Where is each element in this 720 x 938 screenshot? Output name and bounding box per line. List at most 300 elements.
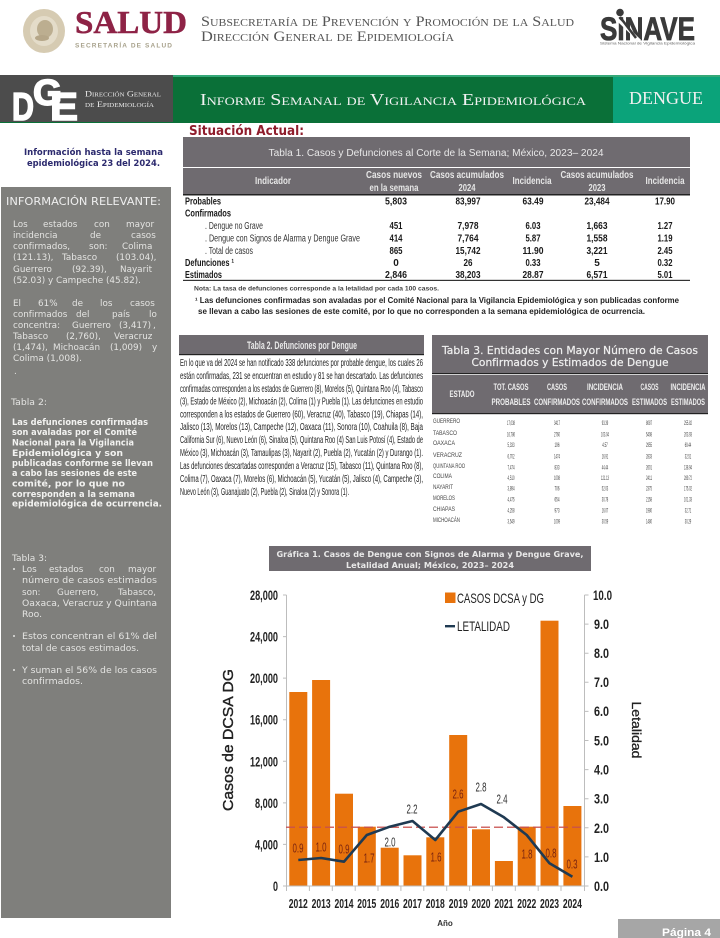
table 3 rows: 6,702: [508, 454, 515, 460]
page number tab: [618, 919, 720, 938]
panel: Tabla 3: 203.93: [684, 432, 692, 438]
table 3 rows: 2601: [646, 466, 652, 472]
table 1 header row: en la semana: [370, 183, 419, 194]
bullet list: Tabla 3 notes: total de casos estimados.: [22, 644, 139, 654]
table 3 rows: 2955: [646, 443, 652, 449]
right axis labels: 4.0: [594, 763, 609, 778]
table 3 rows: 30.29: [685, 520, 692, 526]
table 1 header row: 2024: [458, 183, 476, 194]
left axis labels: 28,000: [250, 588, 278, 603]
right axis labels: 9.0: [594, 617, 609, 632]
paragraph: Tabla 2 note: Las defunciones confirmadas: [12, 417, 148, 427]
header: institutional logos and titles: [23, 4, 695, 53]
table 3 rows: 4,510: [508, 476, 515, 482]
table 3 rows: 16.91: [602, 454, 609, 460]
table 3 rows: COLIMA: [433, 474, 452, 480]
table 1 rows: 11.90: [522, 246, 544, 257]
table 3 rows: 44.44: [602, 466, 609, 472]
legend: [445, 590, 544, 634]
left axis labels: 20,000: [250, 671, 278, 686]
table 3 rows: 8087: [646, 421, 652, 427]
table 1 rows: 0.33: [526, 258, 541, 269]
data labels: lethality: 2.2: [406, 802, 418, 816]
table 1 rows: 3,221: [586, 246, 608, 257]
table 3 rows: 3417: [554, 421, 560, 427]
bullet list: Tabla 3 notes: Y suman el 56% de los casos: [21, 666, 157, 676]
paragraph: concentration: y: [152, 343, 157, 353]
table 1 title band: [183, 137, 690, 167]
table 3 title band: Confirmados y Estimados de Dengue: [472, 357, 668, 369]
table 1 header row: 2023: [588, 183, 606, 194]
year labels: 2016: [380, 897, 399, 911]
table 1 rows: 2,846: [385, 270, 407, 281]
bullet list: Tabla 3 notes: Estos concentran el 61% del: [22, 632, 157, 642]
bullet list: Tabla 3 notes: Tabasco,: [117, 588, 156, 598]
paragraph: incidence: (52.03) y Campeche (45.82).: [13, 276, 141, 286]
panel: Tabla 2: [179, 335, 424, 498]
panel: Tabla 3: [432, 335, 708, 526]
data labels: lethality: 2.0: [384, 834, 396, 850]
year labels: 2021: [494, 897, 513, 911]
table 3 rows: 121.13: [601, 476, 609, 482]
table 1 footnote: [195, 296, 680, 316]
paragraph: Tabla 2 note: a cabo las sesiones de este: [12, 468, 137, 478]
table 3 rows: OAXACA: [433, 441, 455, 447]
table 3 rows: QUINTANA ROO: [433, 464, 465, 470]
table 2 paragraph: Colima (7), Oaxaca (7), Morelos (6), Michoacán (5), Yucatán (5), Jalisco (4), Campeche (3),: [180, 474, 423, 485]
table 1 header row: Incidencia: [646, 176, 685, 187]
table 3 rows: 2375: [646, 486, 652, 492]
table 1 rows: 83,997: [456, 196, 481, 208]
table 3 rows: NAYARIT: [433, 485, 453, 491]
x axis title: Año: [437, 919, 453, 928]
table 1 rows: 6.03: [526, 221, 541, 232]
data labels: lethality: 1.0: [316, 840, 326, 854]
paragraph: Tabla 2 note: son avaladas por el Comité: [12, 427, 137, 437]
table 3 rows: TABASCO: [433, 431, 457, 437]
table 3 rows: 103.04: [601, 432, 609, 438]
table 2 paragraph: están confirmadas, 231 se encuentran en estudio y 81 se han descartado. Las defunciones: [180, 371, 423, 382]
paragraph: concentration: El: [13, 299, 21, 309]
table 1 rows: 23,484: [584, 196, 610, 208]
table 1 footnote: ¹ Las defunciones confirmadas son avaladas por el Comité Nacional para la Vigilancia Epidemiológica y son publicadas conforme: [195, 296, 680, 305]
paragraph: concentration: los: [100, 299, 113, 309]
header subtitle line 1: Subsecretaría de Prevención y Promoción de la Salud: [201, 14, 574, 30]
table 1 rows: Estimados: [185, 270, 222, 281]
table 1 rows: 26: [464, 258, 473, 269]
banner topic: dengue: DENGUE: [629, 88, 703, 108]
table 3 rows: 16,786: [507, 432, 515, 438]
table 1 rows: 63.49: [522, 196, 544, 208]
table 1 note: Nota: La tasa de defunciones corresponde a la letalidad por cada 100 casos.: [194, 286, 439, 292]
year labels: 2015: [357, 897, 376, 911]
table 1 rows: 5.87: [526, 234, 541, 244]
paragraph: incidence: Colima: [122, 242, 152, 252]
paragraph: incidence: (92.39),: [72, 265, 107, 275]
table 3 rows: 69.44: [685, 443, 692, 449]
table 3 rows: [433, 419, 692, 526]
table 1 rows: Defunciones ¹: [185, 258, 234, 269]
table 2 title band: Tabla 2. Defunciones por Dengue: [247, 340, 357, 352]
bullet list: Tabla 3 notes: estados: [49, 565, 84, 575]
bullet list: Tabla 3 notes: mayor: [128, 565, 157, 575]
table 3 rows: 1480: [646, 520, 652, 526]
DGE caption: de Epidemiología: [85, 99, 155, 109]
table 1 rows: 15,742: [456, 246, 481, 257]
panel: Tabla 3: 289.72: [684, 476, 692, 482]
panel: Tabla 3: 255.82: [684, 421, 692, 427]
label: Tabla 2: Tabla 2:: [10, 398, 47, 408]
bullet list: Tabla 3 notes: con: [99, 565, 115, 575]
table 1 rows: 1.19: [658, 234, 673, 244]
bullet list: Tabla 3 notes: Oaxaca, Veracruz y Quintana: [22, 599, 157, 609]
logo: SINAVE: Sistema Nacional de Vigilancia Epidemiológica: [600, 42, 695, 46]
table 1 rows: 414: [390, 234, 403, 244]
paragraph: incidence: Nayarit: [120, 265, 153, 275]
bars: annual cases: [289, 621, 581, 886]
data labels: lethality: 0.3: [566, 856, 578, 872]
table 1 rows: 1,663: [586, 221, 608, 232]
paragraph: concentration: Guerrero: [72, 321, 111, 331]
data labels: lethality: 2.4: [496, 792, 508, 806]
paragraph: concentration: Colima (1,008).: [13, 354, 82, 364]
data labels: lethality: 0.8: [546, 846, 556, 860]
table 3 rows: 1474: [554, 454, 560, 460]
bullet list: Tabla 3 notes: Roo.: [22, 610, 42, 620]
chart title band: Gráfica 1. Casos de Dengue con Signos de Alarma y Dengue Grave,: [276, 550, 584, 559]
table 3 rows: 2760: [554, 432, 560, 438]
logo: DGE: E: [50, 86, 78, 129]
table 1 rows: . Total de casos: [205, 246, 253, 257]
table 3 rows: MORELOS: [433, 496, 455, 502]
paragraph: incidence: casos: [131, 231, 156, 241]
paragraph: incidence: con: [94, 220, 110, 230]
DGE caption: [85, 88, 161, 109]
table 1 header row: Casos acumulados: [560, 170, 634, 181]
table 2 paragraph: Jalisco (13), Morelos (13), Campeche (12), Oaxaca (11), Sonora (10), Coahuila (8), Baja: [180, 422, 423, 433]
data labels: lethality: 1.7: [364, 850, 374, 866]
table 3 rows: 93.39: [602, 421, 609, 427]
table 1 rows: . Dengue no Grave: [205, 221, 263, 232]
paragraph: concentration: confirmados: [13, 310, 68, 320]
data labels: lethality: 2.8: [476, 780, 486, 794]
panel: Tabla 3: 175.02: [684, 486, 692, 492]
year labels: 2017: [403, 897, 422, 911]
table 3 title band: [432, 335, 708, 374]
table 3 rows: 196: [554, 443, 560, 449]
paragraph: Tabla 2 note: corresponden a la semana: [12, 489, 135, 499]
year labels: 2022: [517, 897, 536, 911]
paragraph: Tabla 2 note: Nacional para la Vigilancia: [12, 438, 134, 448]
table 1 rows: 7,978: [458, 221, 479, 232]
paragraph: Tabla 2 note: [12, 417, 162, 508]
logo text: SALUD: SALUD: [75, 4, 187, 40]
table 1 rows: 0.32: [658, 258, 673, 269]
table 3 rows: 2158: [646, 498, 652, 504]
table 1 footnote: se llevan a cabo las sesiones de este comité, por lo que no corresponden a la semana epidemiológica de ocurrencia.: [198, 307, 645, 316]
paragraph: incidence: Los: [13, 220, 28, 230]
paragraph: concentration: ,: [153, 321, 156, 331]
paragraph: concentration: de: [72, 299, 83, 309]
label: Tabla 3: Tabla 3:: [11, 554, 47, 564]
paragraph: Tabla 2 note: comité, por lo que no: [12, 478, 125, 488]
table 2 title band: [179, 335, 424, 355]
paragraph: incidence: estados: [43, 220, 78, 230]
paragraph: Tabla 2 note: Epidemiológica y son: [12, 448, 123, 458]
left axis labels: 16,000: [250, 713, 278, 728]
table 3 title band: Tabla 3. Entidades con Mayor Número de Casos: [441, 345, 698, 357]
table 1 rows: Probables: [185, 196, 221, 208]
panel: Tabla 3: 138.94: [684, 466, 692, 472]
logo: DGE: G: [33, 72, 62, 113]
table 3 rows: 17,038: [507, 421, 515, 427]
table 1 rows: 1,558: [586, 234, 608, 244]
data labels: lethality: [292, 780, 578, 872]
chart title band: Letalidad Anual; México, 2023– 2024: [346, 560, 514, 570]
table 3 rows: 973: [554, 508, 560, 514]
table 3 rows: 30.78: [602, 498, 609, 504]
year labels: [289, 897, 582, 911]
paragraph: concentration: lo: [149, 310, 157, 320]
table 1 rows: Confirmados: [185, 208, 231, 220]
table 1 rows: 28.87: [522, 270, 544, 281]
table 1 header row: Incidencia: [512, 176, 552, 187]
table 2 paragraph: Las defunciones descartadas corresponden a Veracruz (15), Tabasco (11), Quintana Roo (8),: [180, 461, 423, 472]
paragraph: incidence: [13, 220, 156, 286]
logo: DGE: [12, 72, 78, 129]
table 1 rows: 5.01: [658, 270, 673, 281]
paragraph: concentration: (1,009): [110, 343, 142, 353]
axes: [283, 595, 588, 891]
table 3 header row: CONFIRMADOS: [534, 397, 580, 407]
paragraph: concentration: (1,474),: [13, 343, 48, 353]
panel: Tabla 3: 101.33: [684, 498, 692, 504]
table 3 rows: 4,475: [508, 498, 515, 504]
table 3 header row: ESTIMADOS: [632, 397, 667, 407]
table 1 rows: [183, 196, 690, 281]
paragraph: concentration: 61%: [38, 299, 58, 309]
paragraph: concentration: (3,417): [119, 321, 151, 331]
left axis title: Casos de DCSA DG: [220, 669, 237, 811]
right axis labels: 6.0: [594, 704, 609, 719]
paragraph: concentration: (2,760),: [66, 332, 101, 342]
bullet list: Tabla 3 notes: Los: [22, 565, 37, 575]
table 3 rows: 1008: [554, 476, 560, 482]
data labels: lethality: 1.6: [430, 850, 442, 864]
table 3 rows: 1009: [554, 520, 560, 526]
table 1 rows: 7,764: [458, 234, 479, 244]
year labels: 2018: [426, 897, 445, 911]
banner: [0, 72, 720, 129]
left axis labels: 24,000: [250, 630, 278, 645]
panel: Tabla 1: [183, 137, 690, 316]
year labels: 2019: [449, 897, 468, 911]
right axis labels: 5.0: [594, 734, 609, 748]
table 3 header row: ESTADO: [450, 389, 474, 399]
table 1 header row: [183, 168, 690, 196]
paragraph: incidence: (121.13),: [13, 253, 53, 263]
table 3 rows: 5408: [646, 432, 652, 438]
paragraph: incidence: (103.04),: [116, 253, 156, 263]
table 3 rows: 32.51: [685, 454, 692, 460]
right axis labels: 10.0: [593, 588, 612, 603]
DGE caption: Dirección General: [85, 88, 161, 98]
table 1 rows: 38,203: [456, 270, 481, 281]
table 2 paragraph: corresponden a los estados de Guerrero (60), Veracruz (40), Tabasco (19), Chiapas (14),: [180, 410, 423, 420]
right axis labels: 2.0: [594, 821, 609, 836]
table 3 rows: 833: [554, 466, 560, 472]
table 3 header row: CASOS: [640, 382, 658, 392]
right axis labels: 3.0: [594, 792, 609, 807]
right axis labels: 8.0: [594, 646, 609, 661]
table 2 paragraph: México (3), Michoacán (3), Tamaulipas (3), Nayarit (2), Puebla (2), Yucatán (2) y Durango (1).: [180, 448, 423, 459]
table 1 rows: 0: [393, 258, 399, 269]
left axis labels: 12,000: [250, 754, 278, 769]
table 3 header row: CONFIRMADOS: [582, 397, 628, 407]
table 3 rows: 1980: [646, 508, 652, 514]
section heading: Situación Actual:: [189, 124, 304, 139]
panel: relevant information sidebar: [1, 187, 171, 918]
logo subtitle: SECRETARÍA DE SALUD: [75, 40, 172, 50]
paragraph: concentration: concentra:: [13, 321, 60, 331]
left axis labels: [250, 588, 278, 894]
left axis labels: 8,000: [255, 796, 278, 811]
table 2 paragraph: (3), Estado de México (2), Michoacán (2), Colima (1) y Puebla (1). Las defunciones en estudio: [180, 396, 423, 408]
paragraph: concentration: Veracruz: [114, 332, 153, 342]
sidebar heading: INFORMACIÓN RELEVANTE:: [6, 195, 161, 208]
line: lethality: [298, 804, 572, 877]
year labels: 2012: [289, 897, 308, 911]
table 1 rows: 2.45: [658, 246, 673, 257]
table 1 header row: Casos acumulados: [430, 170, 504, 181]
table 3 header row: CASOS: [547, 382, 567, 392]
year labels: 2020: [472, 897, 491, 911]
table 1 rows: 5,803: [385, 196, 407, 208]
paragraph: concentration: Tabasco: [12, 332, 48, 342]
paragraph: Tabla 2 note: publicadas conforme se llevan: [12, 458, 153, 468]
left axis labels: 0: [273, 879, 278, 894]
table 1 title band: Tabla 1. Casos y Defunciones al Corte de la Semana; México, 2023– 2024: [268, 148, 604, 159]
table 3 rows: 706: [554, 486, 560, 492]
table 1 header row: Casos nuevos: [366, 170, 422, 181]
table 3 rows: MICHOACÁN: [433, 517, 460, 524]
table 3 rows: 2411: [646, 476, 652, 482]
table 3 rows: VERACRUZ: [433, 453, 462, 459]
table 2 paragraph: Nuevo León (3), Guanajuato (2), Puebla (2), Sinaloa (2) y Sonora (1).: [180, 487, 349, 498]
data labels: lethality: 1.8: [522, 846, 532, 862]
table 2 paragraph: En lo que va del 2024 se han notificado 338 defunciones por probable dengue, los cuales 26: [180, 358, 423, 369]
table 3 header row: TOT. CASOS: [494, 382, 528, 392]
table 1 rows: 1.27: [658, 221, 673, 232]
table 3 rows: 3,894: [508, 486, 515, 492]
bullet list: Tabla 3 notes: son:: [22, 588, 41, 598]
table 1 rows: 6,571: [586, 270, 608, 281]
banner title: Informe Semanal de Vigilancia Epidemiológica: [200, 90, 586, 109]
table 1 rows: 17.90: [655, 196, 675, 208]
table 3 rows: 16.07: [602, 508, 609, 514]
note: data cutoff: epidemiológica 23 del 2024.: [27, 158, 160, 169]
paragraph: concentration: del: [76, 310, 89, 320]
paragraph: incidence: incidencia: [13, 231, 58, 241]
legend: CASOS DCSA y DG: [457, 590, 544, 606]
table 3 rows: 5,333: [508, 443, 515, 449]
combo chart: dengue cases and lethality: [220, 588, 643, 928]
table 3 rows: 654: [554, 498, 560, 504]
logo: SINAVE: SINAVE: [600, 11, 695, 47]
table 3 rows: 30.59: [602, 520, 609, 526]
paragraph: incidence: son:: [89, 242, 108, 252]
right axis labels: 0.0: [594, 879, 609, 894]
table 2 paragraph: California Sur (6), Nuevo León (6), Sinaloa (5), Quintana Roo (4) San Luis Potosí (4), Estado de: [180, 435, 423, 446]
data labels: lethality: 2.6: [452, 786, 464, 802]
paragraph: concentration: .: [14, 367, 17, 377]
year labels: 2013: [312, 897, 331, 911]
bullet list: Tabla 3 notes: confirmados.: [22, 677, 83, 687]
paragraph: concentration: [12, 299, 157, 377]
table 3 rows: 4.57: [602, 443, 608, 449]
data labels: lethality: 0.9: [338, 842, 350, 856]
table 3 rows: CHIAPAS: [433, 507, 455, 513]
chart title band: [269, 546, 591, 571]
right axis labels: 7.0: [594, 675, 609, 690]
table 1 rows: . Dengue con Signos de Alarma y Dengue Grave: [205, 234, 360, 244]
header subtitle line 2: Dirección General de Epidemiología: [201, 29, 454, 45]
paragraph: concentration: país: [112, 310, 130, 320]
paragraph: incidence: de: [90, 231, 101, 241]
table 3 rows: 4,258: [508, 508, 515, 514]
year labels: 2023: [540, 897, 559, 911]
table 3 rows: 52.03: [602, 486, 609, 492]
table 1 rows: 865: [390, 246, 403, 257]
paragraph: Tabla 2 note: epidemiológica de ocurrencia.: [12, 498, 162, 508]
paragraph: incidence: Guerrero: [13, 265, 52, 275]
paragraph: concentration: Michoacán: [53, 343, 100, 353]
left axis labels: 4,000: [255, 837, 278, 852]
reference line: 2% lethality: [286, 826, 585, 828]
table 3 rows: 2833: [646, 454, 652, 460]
bullet list: Tabla 3 notes: número de casos estimados: [22, 576, 157, 586]
table 1 rows: 5: [594, 258, 600, 269]
right axis labels: [593, 588, 612, 894]
table 1 rows: 451: [390, 221, 403, 232]
paragraph: incidence: confirmados,: [13, 242, 70, 252]
data labels: lethality: 0.9: [292, 840, 304, 856]
table 3 rows: 7,474: [508, 466, 515, 472]
table 2 paragraph: [180, 358, 423, 498]
year labels: 2014: [334, 897, 354, 911]
bullet list: Tabla 3 notes: Guerrero,: [57, 588, 99, 598]
legend: LETALIDAD: [457, 618, 510, 634]
table 1 header row: Indicador: [255, 176, 291, 187]
right axis labels: 1.0: [594, 850, 609, 865]
table 3 rows: 32.71: [685, 508, 692, 514]
right axis title: Letalidad: [629, 702, 643, 759]
table 3 rows: GUERRERO: [433, 419, 460, 425]
table 3 header row: INCIDENCIA: [587, 382, 623, 392]
icon: national emblem: [23, 9, 65, 53]
bullet list: Tabla 3 notes: [13, 565, 157, 687]
note: data cutoff: [24, 147, 163, 169]
logo: DGE: D: [12, 86, 34, 129]
table 3 header row: [432, 375, 708, 414]
paragraph: incidence: Tabasco: [61, 253, 97, 263]
year labels: 2024: [563, 897, 582, 911]
table 3 rows: 3,549: [508, 520, 515, 526]
note: data cutoff: Información hasta la semana: [24, 147, 163, 158]
paragraph: incidence: mayor: [126, 220, 155, 230]
table 3 header row: PROBABLES: [492, 397, 530, 407]
table 2 paragraph: confirmadas corresponden a los estados de Guerrero (8), Morelos (5), Quintana Roo (4), Tabasco: [180, 384, 423, 395]
